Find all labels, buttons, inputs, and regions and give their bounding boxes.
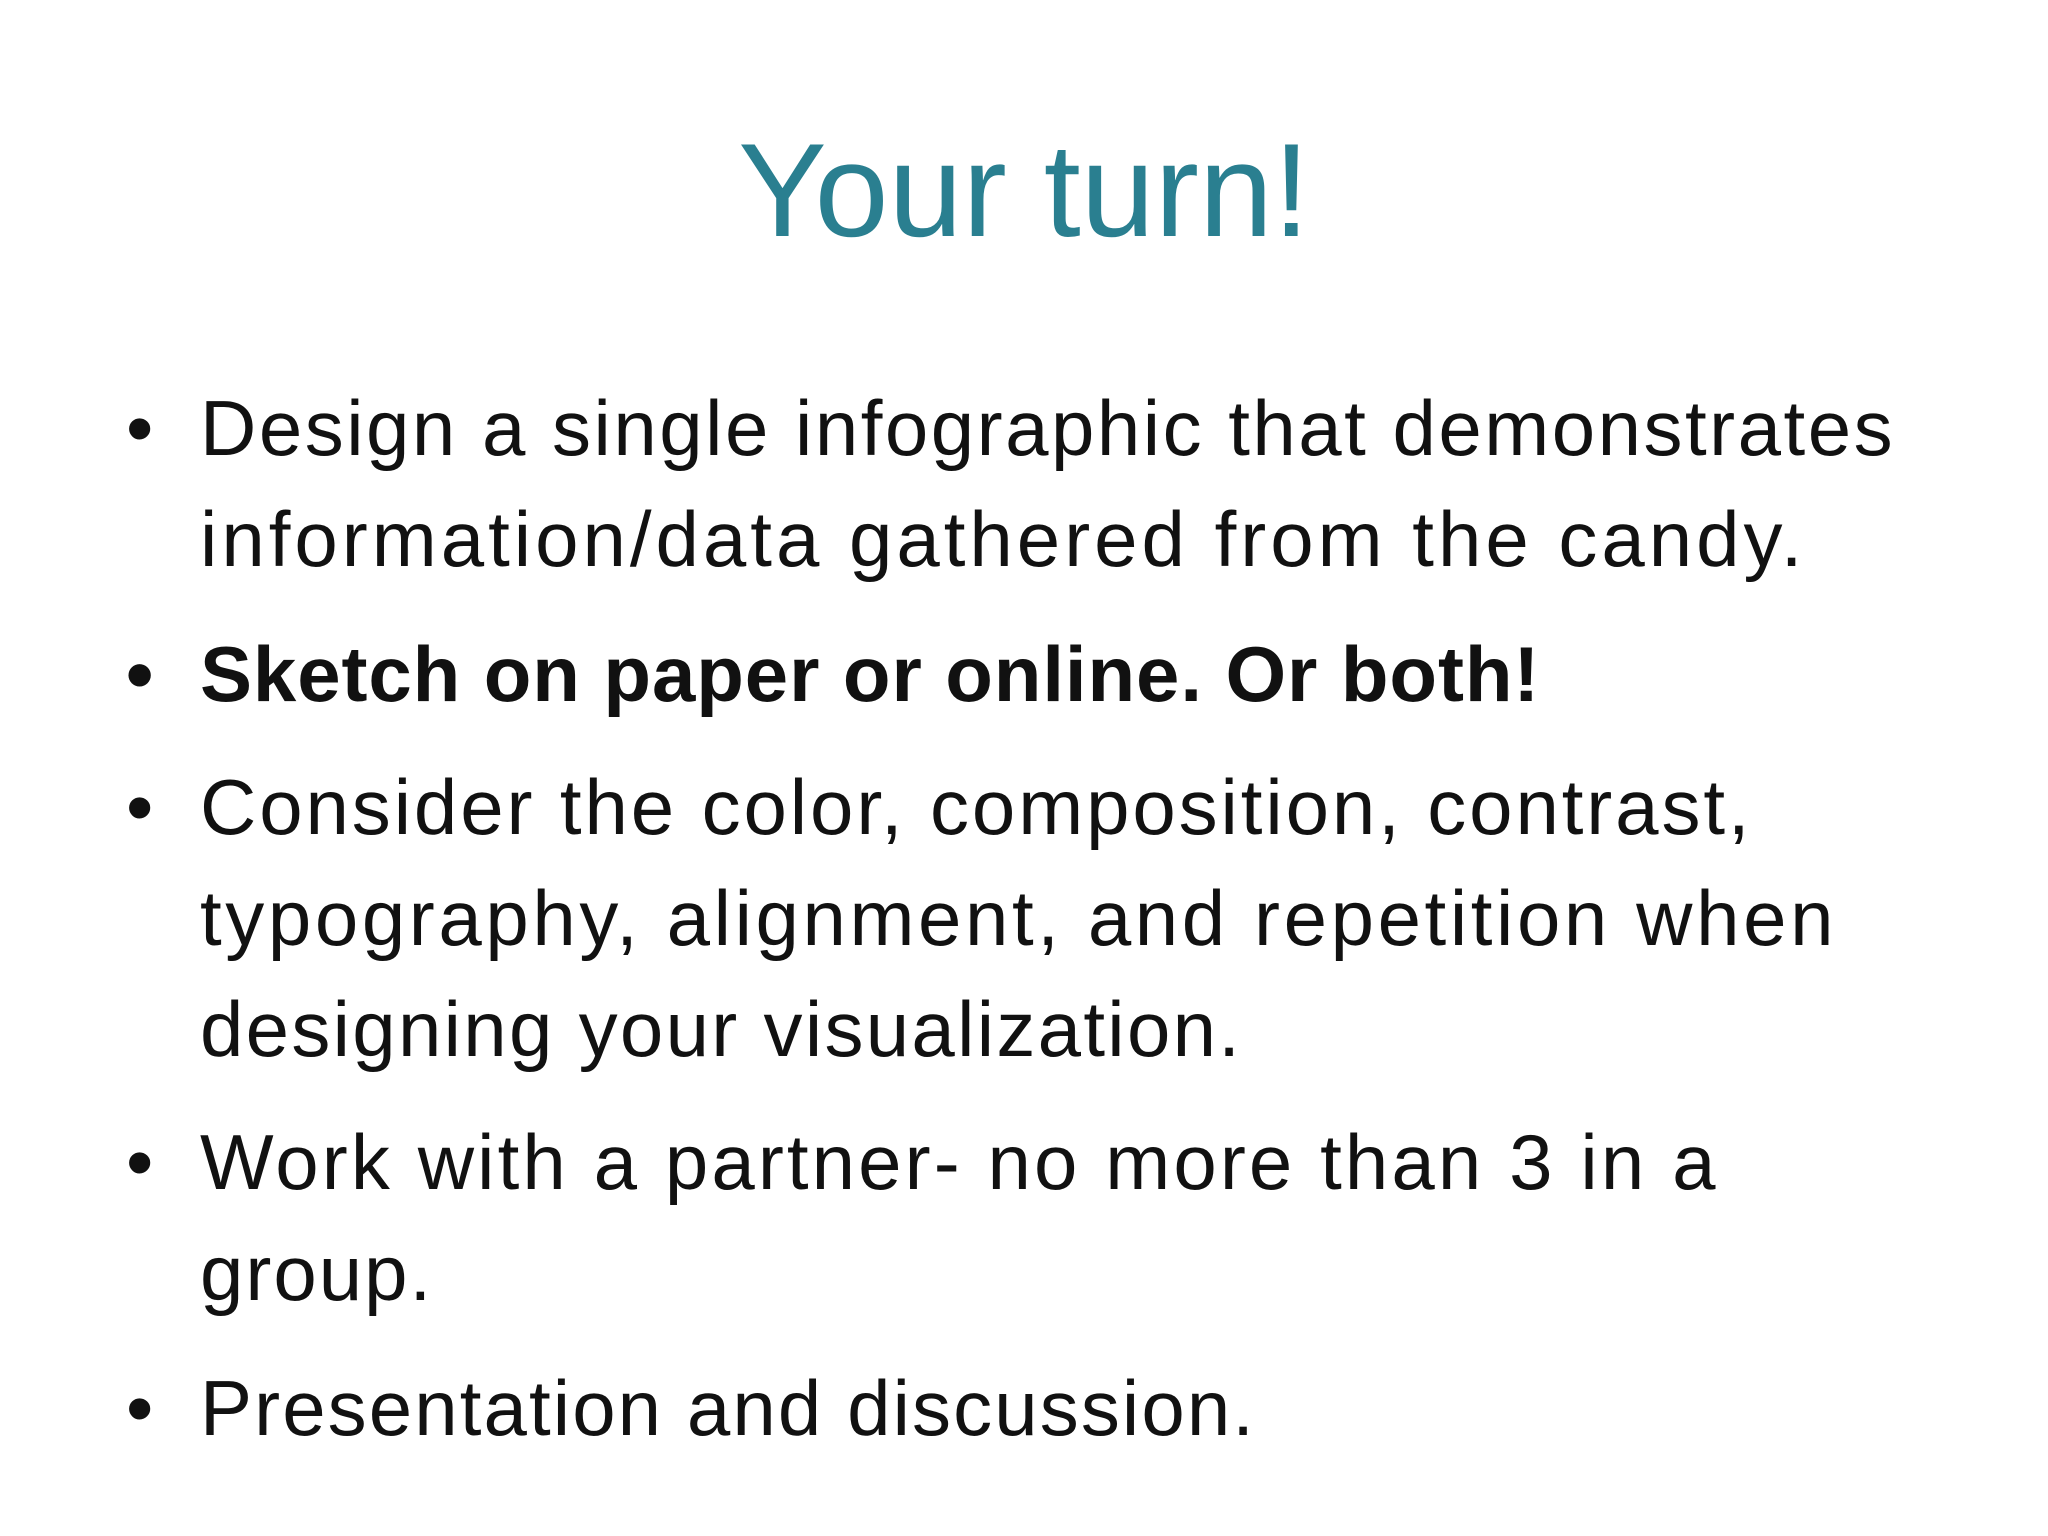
bullet 5: •: [126, 1364, 153, 1452]
bullet 3: [126, 763, 1837, 1073]
bullet 4: group.: [200, 1229, 433, 1317]
bullet 1: •: [126, 384, 153, 472]
bullet 1: information/data gathered from the candy.: [200, 495, 1806, 583]
bullet 3: •: [126, 763, 153, 851]
bullet 2: •: [126, 630, 153, 718]
bullet 4: Work with a partner- no more than 3 in a: [200, 1118, 1719, 1206]
bullet 4: •: [126, 1118, 153, 1206]
bullet 4: [126, 1118, 1719, 1317]
bullet 3: designing your visualization.: [200, 985, 1242, 1073]
bullet 1: Design a single infographic that demonstrates: [200, 384, 1895, 472]
bullet 1: [126, 384, 1895, 583]
bullet 3: typography, alignment, and repetition when: [200, 874, 1837, 962]
title: Your turn!: [738, 117, 1310, 265]
bullet list: [126, 384, 1895, 1452]
bullet 2: Sketch on paper or online. Or both!: [200, 630, 1540, 718]
bullet 5: Presentation and discussion.: [200, 1364, 1256, 1452]
bullet 3: Consider the color, composition, contrast,: [200, 763, 1752, 851]
